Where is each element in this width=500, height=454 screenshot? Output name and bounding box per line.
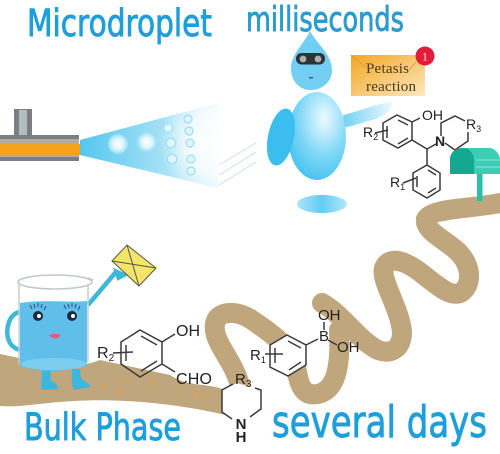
motion lines <box>219 143 256 185</box>
title: milliseconds: milliseconds <box>246 0 404 40</box>
character: beaker with face <box>7 270 126 390</box>
chemical structure: piperidine: R <box>235 371 246 388</box>
legs and feet <box>41 369 58 390</box>
chemical structure: phenylboronic acid: 1 <box>261 355 266 365</box>
road: brown winding path <box>0 203 500 415</box>
chemical structure: phenylboronic acid: R <box>250 347 261 364</box>
notification badge: 1 <box>422 50 428 64</box>
chemical structure: phenylboronic acid <box>250 307 360 376</box>
chemical structure: product: 3 <box>476 124 481 134</box>
chemical structure: piperidine <box>222 371 261 446</box>
title: Microdroplet: Microdroplet <box>27 2 212 45</box>
mask <box>296 53 325 64</box>
chemical structure: product: N <box>435 133 445 149</box>
envelope: Petasis reaction <box>351 46 434 96</box>
chemical structure: piperidine: H <box>236 429 246 446</box>
chemical structure: phenylboronic acid: OH <box>318 307 340 324</box>
chemical structure: salicylaldehyde: R <box>97 345 109 362</box>
character: microdroplet agent <box>262 31 392 213</box>
icon: mailbox <box>450 148 500 201</box>
eyes <box>33 311 43 321</box>
chemical structure: salicylaldehyde: CHO <box>176 371 212 388</box>
spray cone with droplets <box>80 103 218 188</box>
chemical structure: product: OH <box>422 107 443 123</box>
chemical structure: phenylboronic acid: B <box>319 328 329 345</box>
chemical structure: product: R <box>390 174 400 190</box>
road specks <box>102 316 242 398</box>
envelope: Petasis reaction: Petasis <box>366 61 409 77</box>
chemical structure: product <box>363 107 481 198</box>
chemical structure: product: R <box>466 116 476 132</box>
chemical structure: phenylboronic acid: OH <box>337 339 360 356</box>
chemical structure: salicylaldehyde <box>97 323 212 388</box>
icon: spray nozzle <box>0 109 81 161</box>
chemical structure: salicylaldehyde: 2 <box>109 353 115 364</box>
envelope: Petasis reaction: reaction <box>366 79 416 95</box>
chemical structure: product: 1 <box>400 182 405 192</box>
title: Bulk Phase: Bulk Phase <box>24 406 181 449</box>
chemical structure: salicylaldehyde: OH <box>176 323 200 340</box>
chemical structure: piperidine: N <box>236 416 246 433</box>
chemical structure: product: 2 <box>373 132 378 142</box>
icon: yellow envelope <box>112 245 156 286</box>
chemical structure: product: R <box>363 124 373 140</box>
chemical structure: piperidine: 3 <box>246 379 252 390</box>
